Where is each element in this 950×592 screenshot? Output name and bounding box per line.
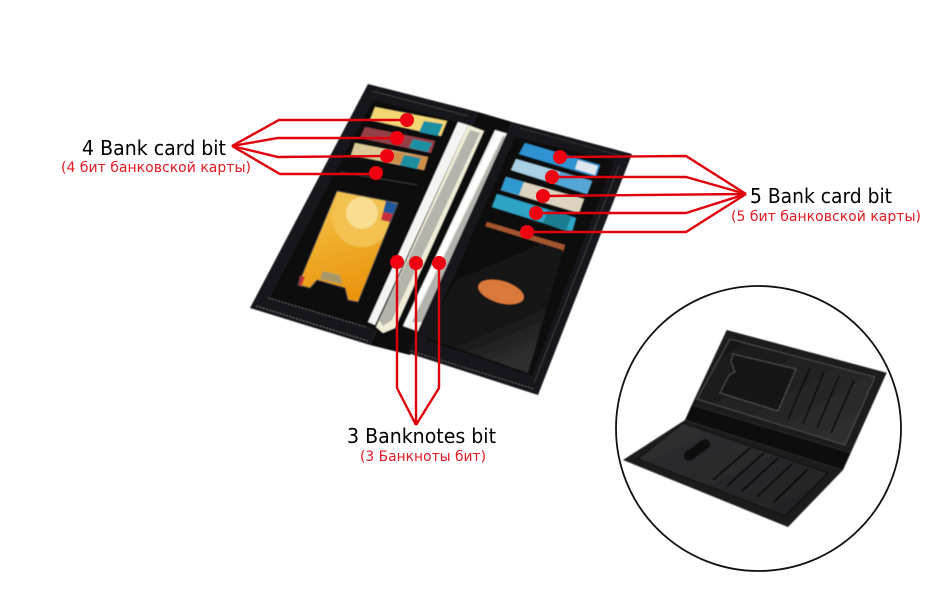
label: 3 banknotes bit: (3 Банкноты бит) (360, 449, 486, 465)
inset window (720, 354, 796, 411)
callout dots: 5 bank card bit (520, 150, 567, 239)
callout lines: 3 banknotes bit (397, 262, 439, 425)
inset circle: closed-pocket view of wallet (616, 286, 901, 571)
inset lower slots (713, 448, 808, 503)
label: 5 bank card bit: (5 бит банковской карты) (731, 209, 921, 225)
inset spine (685, 405, 851, 470)
label: 4 bank card bit: 4 Bank card bit (82, 136, 226, 160)
label: 3 banknotes bit: 3 Banknotes bit (347, 424, 496, 448)
label: 3 banknotes bit (347, 424, 496, 465)
inset upper slots (788, 368, 854, 433)
card: red (360, 127, 435, 153)
label: 4 bank card bit (61, 136, 251, 176)
card: cream (501, 177, 584, 213)
open wallet photo (250, 84, 632, 395)
card: teal (492, 194, 576, 232)
inset lower panel (623, 420, 843, 527)
card window: gold card (298, 191, 398, 302)
callout lines: 5 bank card bit (527, 156, 746, 232)
banknotes (368, 122, 512, 333)
inset oval slot (682, 437, 712, 463)
wallet right panel (408, 122, 632, 395)
label: 5 bank card bit (731, 184, 921, 225)
callout dots: 4 bank card bit (369, 113, 414, 180)
inset upper panel (692, 330, 887, 453)
card: brown (485, 222, 565, 252)
card: tan (351, 143, 428, 170)
label: 4 bank card bit: (4 бит банковской карты) (61, 160, 251, 176)
oval cut-out (475, 275, 527, 309)
card: blue (519, 143, 600, 177)
callout lines: 4 bank card bit (232, 120, 407, 174)
wallet spine (370, 112, 512, 355)
label: 5 bank card bit: 5 Bank card bit (750, 184, 892, 208)
card: light blue (511, 159, 592, 194)
callout dots: 3 banknotes bit (390, 255, 446, 270)
large pocket with oval cut-out (425, 226, 563, 373)
card: yellow (370, 107, 447, 136)
wallet left panel (250, 84, 478, 345)
pocket slit (340, 172, 417, 185)
